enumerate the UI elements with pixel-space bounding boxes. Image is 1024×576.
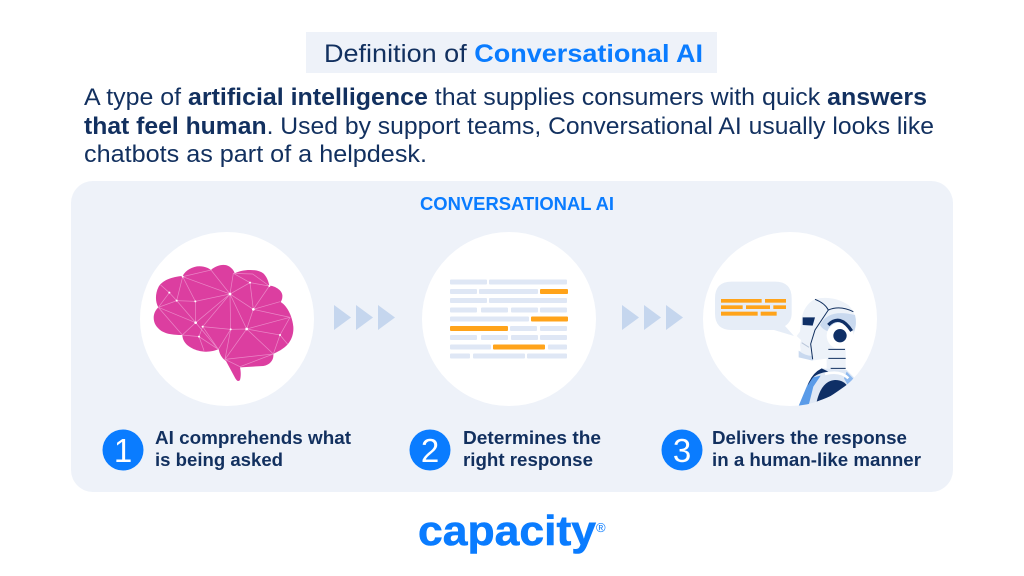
logo: capacity: ® xyxy=(596,520,606,535)
panel: conversational AI xyxy=(71,181,953,492)
step 1 xyxy=(102,428,351,470)
panel heading: CONVERSATIONAL AI xyxy=(420,194,614,214)
step 1: AI comprehends what xyxy=(155,428,351,448)
step 1: is being asked xyxy=(155,450,283,470)
step 3: Delivers the response xyxy=(712,428,907,448)
definition text block xyxy=(84,84,934,168)
logo: capacity: capacity xyxy=(418,507,597,554)
icon: robot with speech bubble xyxy=(703,232,877,407)
robot xyxy=(797,298,856,407)
title xyxy=(306,32,717,73)
definition text block: A type of artificial intelligence that supplies consumers with quick answers xyxy=(84,84,927,111)
arrows: step 1 to 2 xyxy=(334,305,395,330)
arrows: step 2 to 3 xyxy=(622,305,683,330)
step 3 xyxy=(662,428,921,470)
definition text block: chatbots as part of a helpdesk. xyxy=(84,141,427,168)
step 2: 2 xyxy=(421,432,439,469)
step 1: 1 xyxy=(114,432,132,469)
title: Definition of Conversational AI xyxy=(324,40,703,68)
icon: brain xyxy=(140,232,314,406)
step 3: 3 xyxy=(673,432,691,469)
step 2 xyxy=(410,428,601,470)
definition text block: that feel human. Used by support teams, Conversational AI usually looks like xyxy=(84,113,934,140)
step 3: in a human-like manner xyxy=(712,450,921,470)
icon: document with highlighted lines xyxy=(422,232,596,406)
speech bubble xyxy=(715,282,794,336)
step 2: Determines the xyxy=(463,428,601,448)
step 2: right response xyxy=(463,450,593,470)
